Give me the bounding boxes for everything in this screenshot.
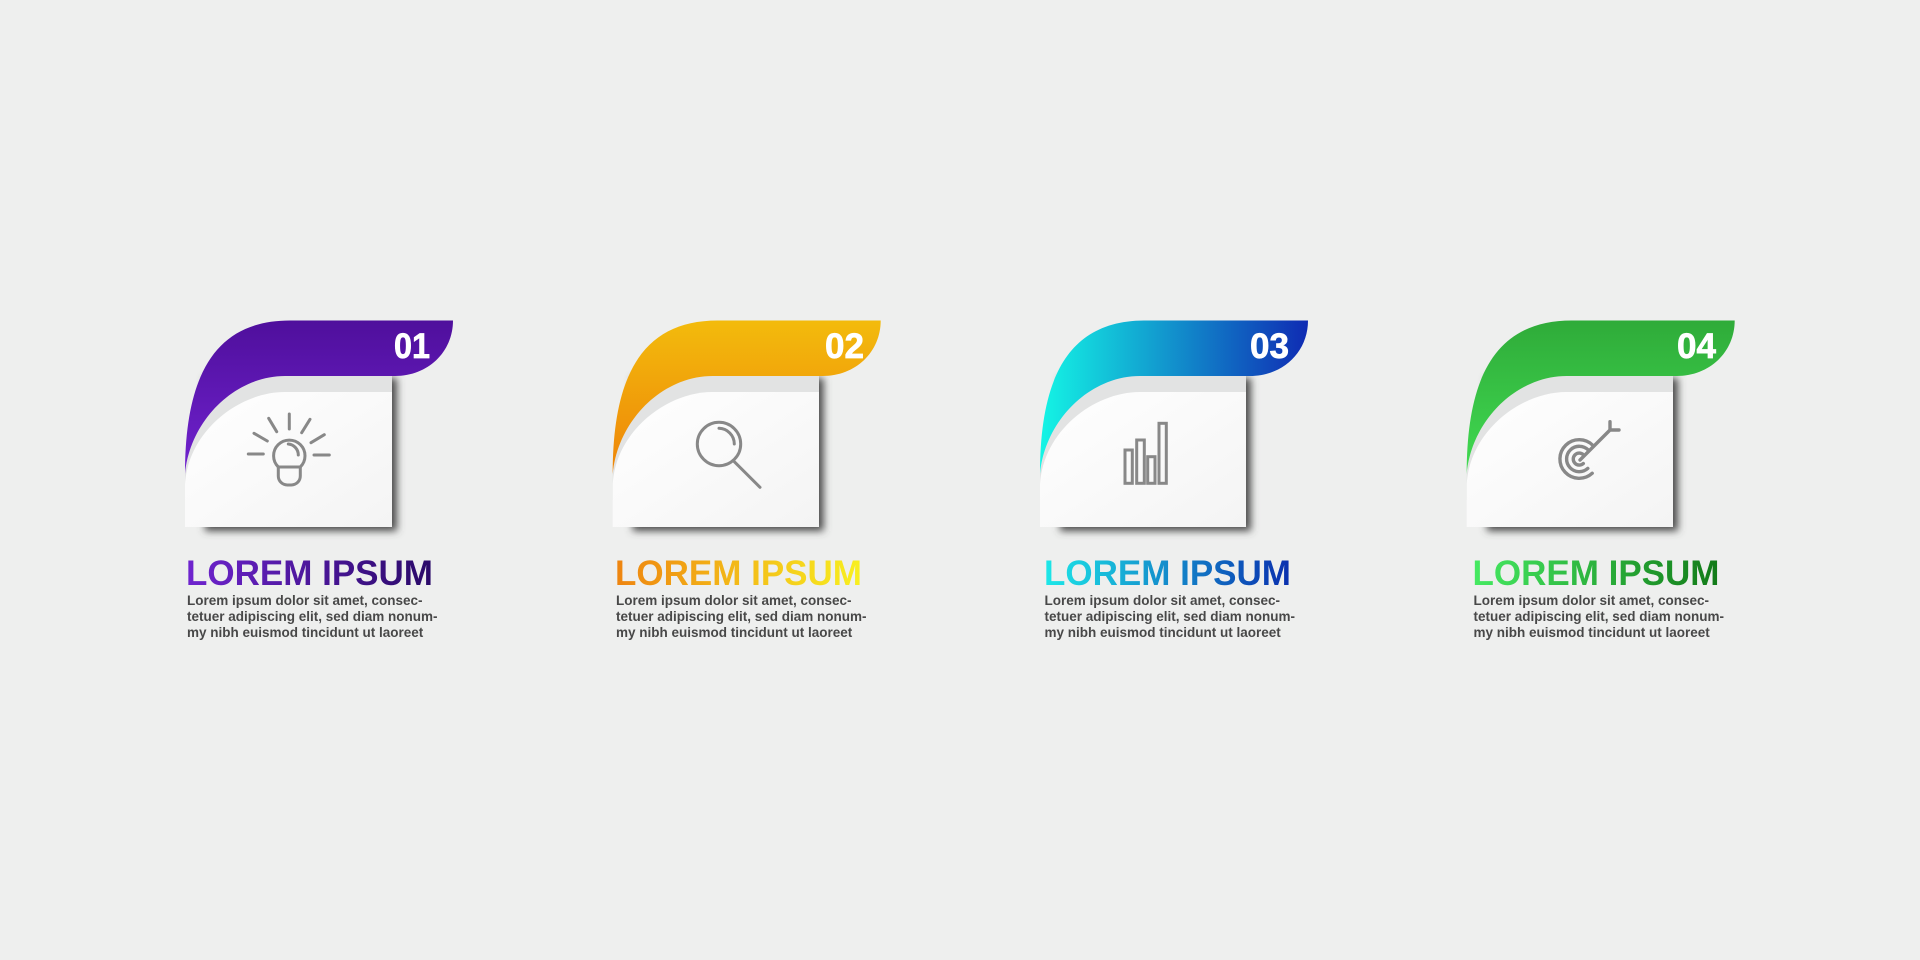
body 03: my nibh euismod tincidunt ut laoreet	[1044, 625, 1281, 640]
text block 02	[615, 554, 867, 640]
body 04: my nibh euismod tincidunt ut laoreet	[1474, 625, 1710, 640]
icon: bar chart	[1125, 423, 1166, 483]
heading 02: LOREM IPSUM	[615, 554, 862, 593]
body 04: tetuer adipiscing elit, sed diam nonum-	[1474, 609, 1724, 624]
text block 03	[1044, 554, 1295, 640]
grey band	[1467, 374, 1673, 500]
card shadow	[1060, 378, 1251, 531]
card shadow	[633, 378, 824, 531]
ribbon	[185, 320, 453, 474]
text block 04	[1472, 554, 1724, 640]
grey band	[1040, 374, 1246, 500]
heading 01: LOREM IPSUM	[186, 554, 433, 593]
ribbon	[613, 320, 881, 474]
panel: card 03	[1040, 320, 1308, 531]
body 03: tetuer adipiscing elit, sed diam nonum-	[1044, 609, 1295, 624]
panel: card 01	[185, 320, 453, 531]
white card	[1040, 392, 1246, 527]
number 01: 01	[394, 327, 430, 366]
icon: target with arrow	[1560, 422, 1619, 478]
body 03: Lorem ipsum dolor sit amet, consec-	[1044, 593, 1280, 608]
white card	[185, 392, 392, 527]
body 04: Lorem ipsum dolor sit amet, consec-	[1474, 593, 1709, 608]
heading 04: LOREM IPSUM	[1472, 554, 1719, 593]
white card	[613, 392, 819, 527]
card shadow	[1487, 378, 1678, 531]
text block 01	[186, 554, 438, 640]
number 02: 02	[825, 327, 864, 366]
panel: card 02	[613, 320, 881, 531]
white card	[1467, 392, 1673, 527]
body 02: tetuer adipiscing elit, sed diam nonum-	[616, 609, 867, 624]
ribbon	[1467, 320, 1735, 474]
body 01: my nibh euismod tincidunt ut laoreet	[187, 625, 424, 640]
icon: magnifier	[697, 422, 760, 487]
icon: light bulb	[248, 414, 329, 485]
panel: card 04	[1467, 320, 1735, 531]
grey band	[185, 374, 392, 500]
body 02: my nibh euismod tincidunt ut laoreet	[616, 625, 853, 640]
body 02: Lorem ipsum dolor sit amet, consec-	[616, 593, 852, 608]
heading 03: LOREM IPSUM	[1044, 554, 1291, 593]
number 04: 04	[1677, 327, 1717, 366]
ribbon	[1040, 320, 1308, 474]
body 01: Lorem ipsum dolor sit amet, consec-	[187, 593, 423, 608]
grey band	[613, 374, 819, 500]
card shadow	[205, 378, 397, 531]
body 01: tetuer adipiscing elit, sed diam nonum-	[187, 609, 438, 624]
number 03: 03	[1250, 327, 1289, 366]
